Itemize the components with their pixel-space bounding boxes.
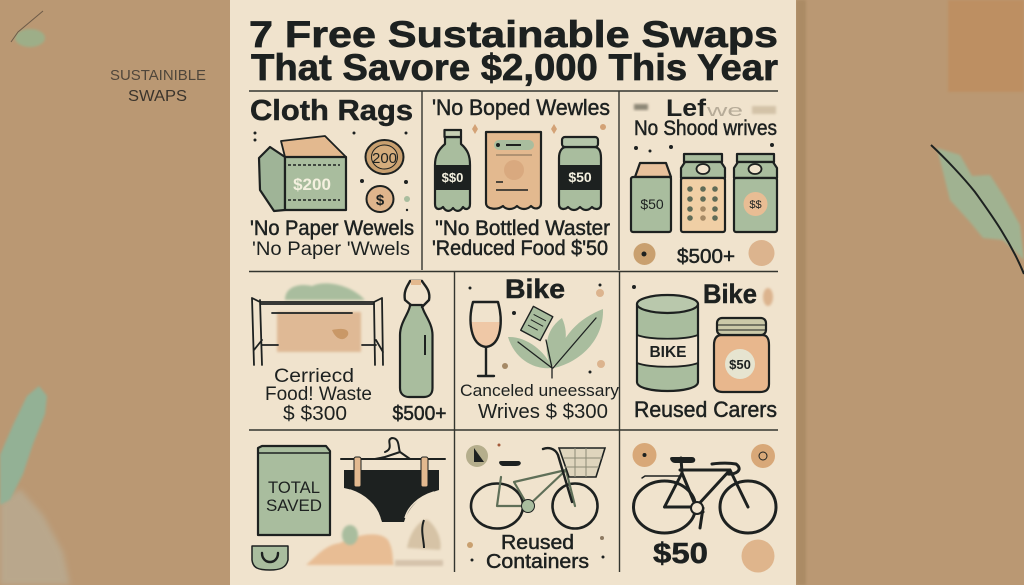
icon: drying rack (252, 283, 383, 365)
panel: food waste (252, 280, 446, 425)
accent dots (472, 124, 606, 134)
title: That Savore $2,000 This Year (251, 47, 778, 88)
icon: book: SAVED (266, 496, 322, 515)
bottom-left leaf (0, 386, 47, 505)
icon: coin 200: 200 (372, 150, 397, 167)
heading: Bike (703, 279, 757, 309)
heading: 'No Boped Wewles (432, 95, 610, 120)
icon: bicycle (471, 448, 605, 528)
caption lines: $ $300 (283, 403, 347, 425)
icon: coin 200 (366, 140, 404, 174)
icon: jar (559, 137, 601, 210)
caption: Reused Carers (634, 397, 777, 422)
heading: Cloth Rags (250, 95, 413, 127)
icon: jar: $50 (568, 169, 592, 185)
sparkles (634, 143, 774, 152)
icon: hanging underwear (341, 438, 445, 522)
caption lines: 'No Paper 'Wwels (252, 239, 410, 260)
icon: carton three: $$ (749, 199, 762, 211)
icon: jar: $50 (729, 357, 751, 372)
amount: $500+ (392, 403, 446, 425)
heading (634, 95, 777, 140)
background label (110, 67, 206, 105)
background panel: left decoration (0, 11, 206, 585)
icon: peach dots (632, 443, 775, 468)
caption lines (265, 366, 372, 425)
icon: jar (714, 318, 769, 392)
icon: bottle: $$0 (442, 170, 463, 185)
sparkles (632, 285, 773, 306)
icon: bottle (435, 130, 470, 211)
icon: bicycle (634, 457, 776, 533)
icon: carton two (681, 154, 725, 232)
faint side shadow (796, 0, 806, 585)
heading: No Shood wrives (634, 117, 777, 140)
icon: book: TOTAL (268, 478, 320, 497)
grid lines (249, 91, 778, 572)
background label: SUSTAINIBLE (110, 67, 206, 84)
paper poster (230, 0, 796, 585)
amount and coins: $500+ (677, 246, 735, 268)
background label: SWAPS (128, 88, 187, 105)
panel: canceled subscriptions (460, 274, 620, 423)
icon: book (258, 446, 330, 535)
caption lines: 'Reduced Food $'50 (432, 237, 608, 260)
icon: can: BIKE (649, 344, 687, 361)
background panel: right decoration (796, 0, 1024, 585)
icon: carton three (734, 154, 777, 232)
icon: box: $200 (293, 175, 331, 194)
title: 7 Free Sustainable Swaps (249, 14, 778, 55)
top-left leaf (11, 11, 45, 47)
sparkles (254, 132, 410, 211)
icon: olive dot (466, 445, 488, 467)
caption lines (486, 532, 589, 573)
heading: we (705, 101, 743, 120)
amount: $50 (653, 538, 708, 570)
icon: green bowl (252, 546, 288, 570)
caption lines: Containers (486, 551, 589, 573)
caption lines (460, 381, 620, 423)
orange patch (948, 0, 1024, 92)
caption lines: ''No Bottled Waster (435, 217, 610, 240)
caption lines: Canceled uneessary (460, 381, 620, 400)
panel: bottled water (432, 95, 610, 260)
title (249, 14, 778, 88)
caption lines: Wrives $ $300 (478, 401, 608, 423)
icon: can (637, 295, 698, 391)
icon: leaves (508, 309, 603, 378)
peach circle (742, 540, 774, 572)
caption lines: Cerriecd (274, 366, 354, 387)
heading: Lef (666, 95, 707, 122)
leaf stem (931, 145, 1024, 274)
icon: receipt (486, 132, 541, 209)
panel: leftovers (631, 95, 777, 268)
icon: carton one (631, 163, 671, 232)
panel: black bike (632, 443, 776, 572)
icon: coin dollar (366, 186, 394, 212)
icon: box (259, 136, 346, 211)
caption lines: 'No Paper Wewels (250, 217, 414, 240)
caption lines (250, 217, 414, 260)
icon: wine glass (471, 302, 501, 376)
heading: Bike (505, 274, 565, 304)
panel: reused containers (466, 444, 605, 573)
sparkles (467, 444, 604, 562)
icon: coin dollar: $ (376, 192, 385, 209)
sparkles (468, 284, 605, 374)
speckled patch (0, 489, 70, 585)
icon: glass bottle (400, 280, 432, 397)
icon: note (521, 306, 553, 341)
caption lines: Food! Waste (265, 384, 372, 405)
panel: total saved (252, 438, 445, 570)
icon: carton one: $50 (640, 196, 664, 212)
caption lines (432, 217, 610, 260)
right leaf (937, 148, 1024, 260)
pile shapes (306, 520, 443, 566)
panel: reused jars (632, 279, 777, 422)
panel: cloth rags (250, 95, 414, 260)
caption lines: Reused (501, 532, 574, 554)
amount and coins (634, 240, 774, 268)
